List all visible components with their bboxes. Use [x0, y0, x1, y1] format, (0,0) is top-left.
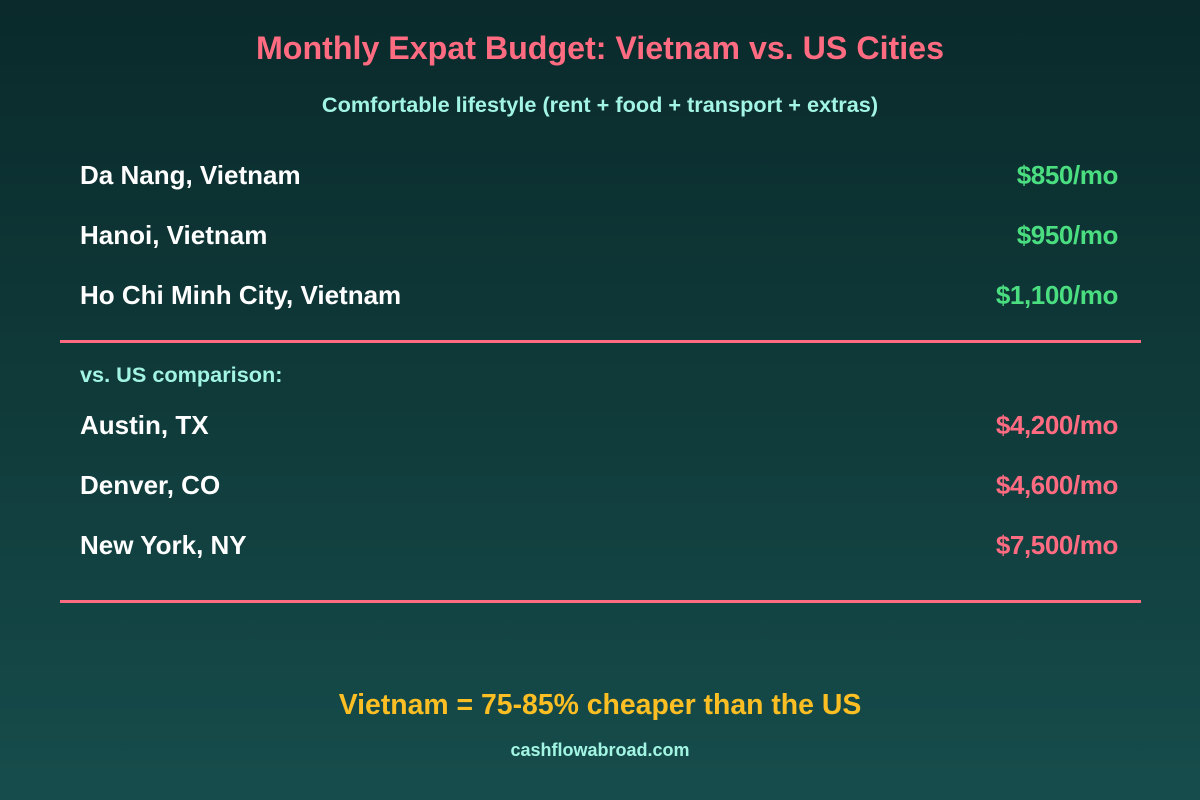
row: Da Nang: Da Nang, Vietnam [80, 160, 301, 190]
title: Monthly Expat Budget: Vietnam vs. US Cities [256, 30, 944, 66]
row: Denver [80, 470, 1118, 500]
row: Da Nang [80, 160, 1118, 190]
row: New York [80, 530, 1118, 560]
row: HCMC: $1,100/mo [996, 280, 1118, 310]
footer url: cashflowabroad.com [510, 740, 690, 760]
row: New York: New York, NY [80, 530, 247, 560]
row: Denver: $4,600/mo [996, 470, 1118, 500]
section label: vs. US comparison: [80, 362, 282, 387]
row: Hanoi: $950/mo [1017, 220, 1118, 250]
row: Austin: Austin, TX [80, 410, 209, 440]
row: Hanoi: Hanoi, Vietnam [80, 220, 267, 250]
conclusion: Vietnam = 75-85% cheaper than the US [339, 689, 861, 721]
row: Austin: $4,200/mo [996, 410, 1118, 440]
row: HCMC: Ho Chi Minh City, Vietnam [80, 280, 401, 310]
subtitle: Comfortable lifestyle (rent + food + transport + extras) [322, 92, 878, 117]
row: Denver: Denver, CO [80, 470, 220, 500]
row: Da Nang: $850/mo [1017, 160, 1118, 190]
row: HCMC [80, 280, 1118, 310]
row: New York: $7,500/mo [996, 530, 1118, 560]
row: Hanoi [80, 220, 1118, 250]
row: Austin [80, 410, 1118, 440]
